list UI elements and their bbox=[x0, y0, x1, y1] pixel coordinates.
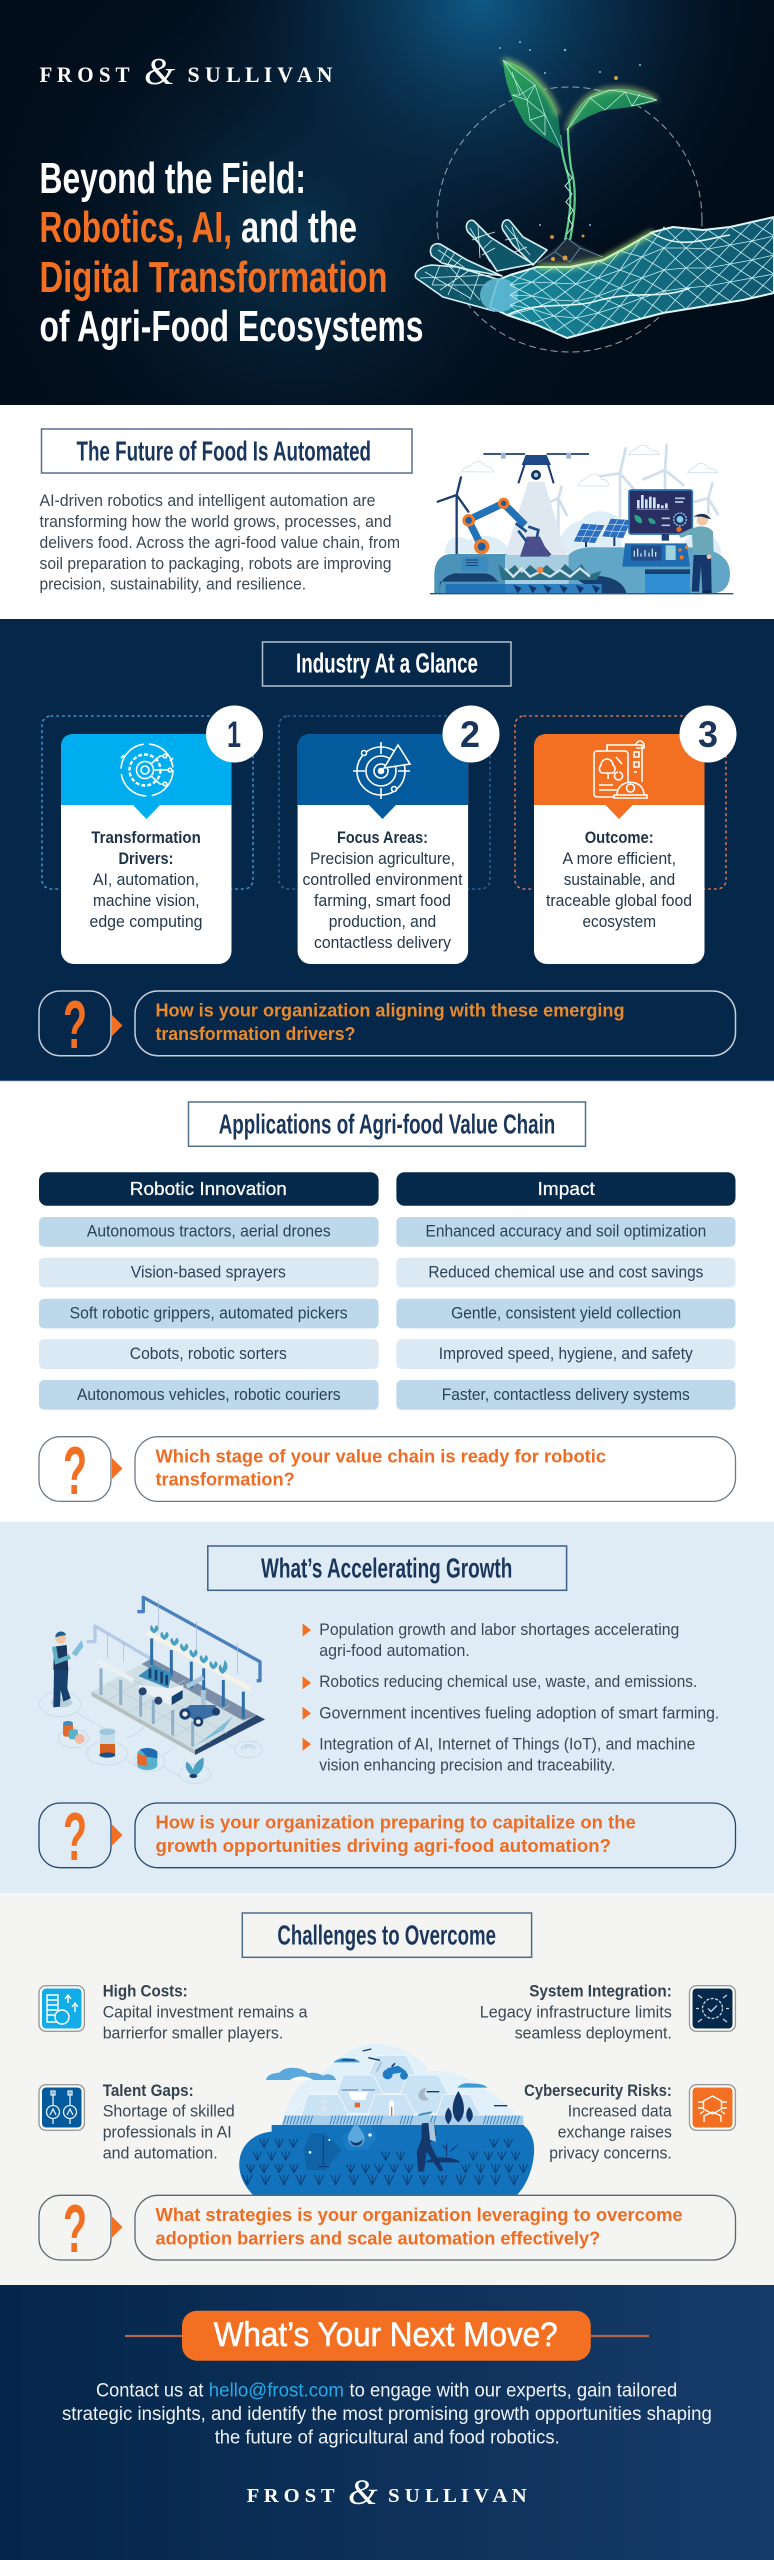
callout: question 4: What strategies is your organization leveraging to overcome bbox=[156, 2205, 683, 2225]
item: cybersecurity risks: Cybersecurity Risks: bbox=[524, 2082, 672, 2100]
callout: question 4: ? bbox=[63, 2191, 87, 2267]
table column: robotic innovation: Vision-based sprayers bbox=[131, 1263, 286, 1281]
callout: question 2: Which stage of your value chain is ready for robotic bbox=[156, 1446, 606, 1466]
item: cybersecurity risks: privacy concerns. bbox=[549, 2144, 672, 2162]
heading: Industry At a Glance bbox=[296, 648, 478, 678]
bullet list: vision enhancing precision and traceability. bbox=[319, 1756, 615, 1774]
item: system integration: seamless deployment. bbox=[515, 2024, 672, 2042]
intro text: delivers food. Across the agri-food value chain, from bbox=[40, 534, 400, 552]
callout: question 2 bbox=[39, 1433, 736, 1509]
number 3 bbox=[680, 706, 736, 762]
bullet list: Robotics reducing chemical use, waste, and emissions. bbox=[319, 1673, 697, 1691]
logo: Frost & Sullivan: & bbox=[348, 2472, 378, 2512]
bullet list: Integration of AI, Internet of Things (IoT), and machine bbox=[319, 1736, 695, 1754]
title: Robotics, AI, bbox=[40, 203, 232, 252]
contact text bbox=[62, 2381, 712, 2448]
table column: impact bbox=[396, 1172, 736, 1410]
control console bbox=[622, 543, 690, 593]
next move banner: What’s Your Next Move? bbox=[214, 2316, 558, 2354]
table column: robotic innovation: Robotic Innovation bbox=[130, 1178, 287, 1199]
field tufts bbox=[243, 2139, 528, 2185]
contact text: to engage with our experts, gain tailored bbox=[350, 2381, 677, 2402]
drone bbox=[342, 2090, 375, 2107]
text: Outcome: bbox=[585, 829, 654, 847]
item: talent gaps: professionals in AI bbox=[103, 2124, 232, 2142]
table column: robotic innovation: Cobots, robotic sorters bbox=[130, 1345, 287, 1363]
item: cybersecurity risks bbox=[524, 2082, 735, 2162]
contact text: the future of agricultural and food robotics. bbox=[215, 2427, 560, 2448]
tractor bbox=[377, 2062, 408, 2080]
text bbox=[302, 829, 463, 952]
panel: footer call to action bbox=[0, 2285, 774, 2560]
callout: question 3 bbox=[39, 1799, 736, 1875]
title: and the bbox=[241, 203, 357, 252]
logo: Frost & Sullivan bbox=[40, 51, 333, 93]
panel: applications of agri-food value chain bbox=[0, 1080, 774, 1522]
icon: network security bbox=[690, 2085, 735, 2130]
callout: question 3: growth opportunities driving agri-food automation? bbox=[156, 1836, 611, 1856]
text: machine vision, bbox=[93, 892, 200, 910]
card 3: outcome bbox=[534, 706, 736, 964]
text: farming, smart food bbox=[314, 892, 451, 910]
logo: Frost & Sullivan: S U L L I V A N bbox=[188, 62, 333, 87]
heading: Applications of Agri-food Value Chain bbox=[219, 1108, 555, 1139]
item: talent gaps bbox=[39, 2082, 235, 2162]
bullet list: Government incentives fueling adoption of smart farming. bbox=[319, 1704, 719, 1722]
plants bbox=[150, 1625, 227, 1674]
title: Digital Transformation bbox=[40, 253, 388, 302]
table column: robotic innovation: Autonomous tractors, aerial drones bbox=[87, 1223, 331, 1241]
text: A more efficient, bbox=[562, 850, 676, 868]
number 1: 1 bbox=[227, 714, 241, 755]
text: AI, automation, bbox=[93, 871, 199, 889]
card 2: focus areas bbox=[298, 706, 500, 964]
item: talent gaps: Shortage of skilled bbox=[103, 2103, 235, 2121]
heading bbox=[188, 1102, 586, 1146]
text: Precision agriculture, bbox=[310, 850, 455, 868]
wind turbines bbox=[438, 445, 718, 555]
callout: question 3: ? bbox=[63, 1799, 87, 1875]
walking farmer bbox=[417, 2112, 443, 2172]
wheat bbox=[319, 2098, 329, 2123]
item: talent gaps: and automation. bbox=[103, 2144, 218, 2162]
intro text: AI-driven robotics and intelligent automation are bbox=[40, 492, 376, 510]
ground hills bbox=[434, 554, 507, 593]
text bbox=[90, 829, 202, 931]
solar panels bbox=[573, 518, 632, 543]
icon: gear with circuits bbox=[121, 744, 173, 796]
blue field bbox=[239, 2125, 534, 2195]
intro text: soil preparation to packaging, robots are improving bbox=[40, 555, 392, 573]
bullet list: Population growth and labor shortages accelerating bbox=[319, 1621, 679, 1639]
heading bbox=[208, 1546, 567, 1590]
callout: question 1 bbox=[39, 987, 736, 1063]
callout: question 2: transformation? bbox=[156, 1470, 295, 1490]
logo: Frost & Sullivan: F R O S T bbox=[247, 2485, 335, 2507]
callout: question 1: transformation drivers? bbox=[156, 1024, 356, 1044]
text: Focus Areas: bbox=[337, 829, 428, 847]
robot vehicles bbox=[138, 1665, 220, 1727]
ground line bbox=[430, 592, 733, 596]
number 2: 2 bbox=[460, 714, 480, 755]
text bbox=[546, 829, 692, 931]
text: contactless delivery bbox=[314, 934, 452, 952]
table column: impact: Enhanced accuracy and soil optimization bbox=[426, 1223, 706, 1241]
outline clouds bbox=[462, 445, 718, 486]
callout: question 4 bbox=[39, 2191, 736, 2267]
sapling stem bbox=[560, 128, 575, 240]
table column: robotic innovation bbox=[39, 1172, 379, 1410]
callout: question 3: How is your organization preparing to capitalize on the bbox=[156, 1813, 636, 1833]
table column: impact: Reduced chemical use and cost savings bbox=[428, 1263, 703, 1281]
text: production, and bbox=[329, 913, 436, 931]
dashboard monitor bbox=[629, 490, 692, 541]
hand fingers bbox=[415, 220, 547, 311]
logo: Frost & Sullivan bbox=[247, 2472, 527, 2512]
contact text: strategic insights, and identify the most promising growth opportunities shaping bbox=[62, 2404, 712, 2425]
title: Beyond the Field: bbox=[40, 154, 306, 203]
item: high costs bbox=[39, 1983, 308, 2042]
card 1: transformation drivers bbox=[61, 706, 263, 964]
hexagons bbox=[302, 2055, 480, 2132]
sapling right leaf bbox=[567, 89, 657, 130]
table column: robotic innovation: Autonomous vehicles, robotic couriers bbox=[77, 1386, 341, 1404]
bullet list: agri-food automation. bbox=[319, 1642, 470, 1660]
clouds bbox=[266, 2068, 336, 2080]
item: high costs: High Costs: bbox=[103, 1983, 188, 2001]
callout: question 4: adoption barriers and scale automation effectively? bbox=[156, 2228, 600, 2248]
hero section bbox=[0, 0, 774, 405]
panel: industry at a glance bbox=[0, 619, 774, 1080]
heading bbox=[242, 1913, 532, 1957]
illustration: farm automation bbox=[430, 445, 733, 594]
item: system integration: System Integration: bbox=[529, 1983, 672, 2001]
robot arm bbox=[461, 498, 538, 572]
text: Drivers: bbox=[118, 850, 174, 868]
heading bbox=[262, 642, 511, 686]
title: of Agri-Food Ecosystems bbox=[40, 302, 424, 351]
drone bbox=[483, 453, 589, 483]
platform bbox=[92, 1658, 257, 1750]
drone light beam bbox=[505, 482, 567, 555]
shelf bbox=[147, 1633, 250, 1689]
shrub mound bbox=[425, 2157, 461, 2162]
connector rings bbox=[39, 1691, 262, 1783]
soil mound bbox=[537, 76, 618, 268]
text: traceable global food bbox=[546, 892, 692, 910]
contact text: Contact us at bbox=[96, 2381, 204, 2402]
intro text bbox=[40, 492, 400, 594]
illustration: digital farm landscape bbox=[239, 2044, 534, 2195]
table column: robotic innovation: Soft robotic grippers, automated pickers bbox=[70, 1304, 348, 1322]
thermometer bbox=[387, 2100, 396, 2124]
water drop bbox=[348, 2122, 365, 2147]
item: cybersecurity risks: exchange raises bbox=[558, 2124, 672, 2142]
panel: what's accelerating growth bbox=[0, 1522, 774, 1893]
worker bbox=[51, 1631, 83, 1707]
table column: impact: Faster, contactless delivery systems bbox=[442, 1386, 690, 1404]
pale background clouds bbox=[445, 511, 722, 553]
tree group bbox=[445, 2091, 473, 2124]
heading: Challenges to Overcome bbox=[277, 1919, 496, 1950]
text: edge computing bbox=[90, 913, 202, 931]
conveyor with plants bbox=[439, 564, 626, 593]
table column: impact: Impact bbox=[538, 1178, 595, 1199]
panel: the future of food is automated bbox=[0, 405, 774, 619]
heading bbox=[42, 429, 412, 473]
heading: The Future of Food Is Automated bbox=[76, 436, 371, 466]
illustration: wireframe hand holding sapling bbox=[415, 41, 774, 352]
callout: question 1: ? bbox=[63, 987, 87, 1063]
item: high costs: Capital investment remains a bbox=[103, 2004, 308, 2022]
intro text: transforming how the world grows, processes, and bbox=[40, 513, 392, 531]
callout: question 1: How is your organization aligning with these emerging bbox=[156, 1000, 624, 1020]
glowing specks bbox=[499, 41, 641, 226]
columns bbox=[152, 1638, 243, 1718]
logo: Frost & Sullivan: S U L L I V A N bbox=[388, 2485, 527, 2507]
number 3: 3 bbox=[698, 714, 718, 755]
title bbox=[40, 154, 424, 351]
resource objects bbox=[63, 1721, 255, 1778]
grass band bbox=[282, 2116, 523, 2125]
callout: question 2: ? bbox=[63, 1433, 87, 1509]
icon: target radar bbox=[353, 742, 410, 799]
hand palm and arm bbox=[480, 217, 774, 338]
logo: Frost & Sullivan: F R O S T bbox=[40, 62, 130, 87]
text: ecosystem bbox=[582, 913, 656, 931]
irrigation pipes bbox=[137, 1597, 260, 1681]
table column: impact: Gentle, consistent yield collection bbox=[451, 1304, 681, 1322]
logo: Frost & Sullivan: & bbox=[144, 51, 175, 93]
item: cybersecurity risks: Increased data bbox=[568, 2103, 673, 2121]
icon: two profile nodes bbox=[39, 2085, 84, 2130]
illustration: isometric smart farm bbox=[39, 1597, 265, 1783]
next move banner bbox=[125, 2311, 649, 2361]
dome bbox=[280, 2044, 523, 2126]
icon: report with helmet bbox=[594, 741, 647, 798]
moon bbox=[419, 2088, 429, 2101]
sapling left leaf bbox=[503, 60, 562, 150]
text: sustainable, and bbox=[564, 871, 675, 889]
number 1 bbox=[206, 706, 263, 762]
heading: What’s Accelerating Growth bbox=[261, 1553, 512, 1584]
intro text: precision, sustainability, and resilience. bbox=[40, 576, 306, 594]
item: system integration: Legacy infrastructure limits bbox=[480, 2004, 672, 2022]
item: system integration bbox=[480, 1983, 735, 2042]
farmer bbox=[676, 514, 714, 593]
contact text: hello@frost.com bbox=[209, 2381, 344, 2402]
text: Transformation bbox=[91, 829, 201, 847]
icon: connected shield chip bbox=[690, 1986, 735, 2031]
number 2 bbox=[442, 706, 500, 762]
item: talent gaps: Talent Gaps: bbox=[103, 2082, 194, 2100]
panel: challenges to overcome bbox=[0, 1893, 774, 2285]
dotted frames bbox=[42, 716, 726, 889]
icon: coins and arrows bbox=[39, 1986, 84, 2031]
table column: impact: Improved speed, hygiene, and safety bbox=[439, 1345, 694, 1363]
item: high costs: barrierfor smaller players. bbox=[103, 2024, 283, 2042]
bullet list bbox=[303, 1621, 719, 1774]
text: controlled environment bbox=[302, 871, 463, 889]
